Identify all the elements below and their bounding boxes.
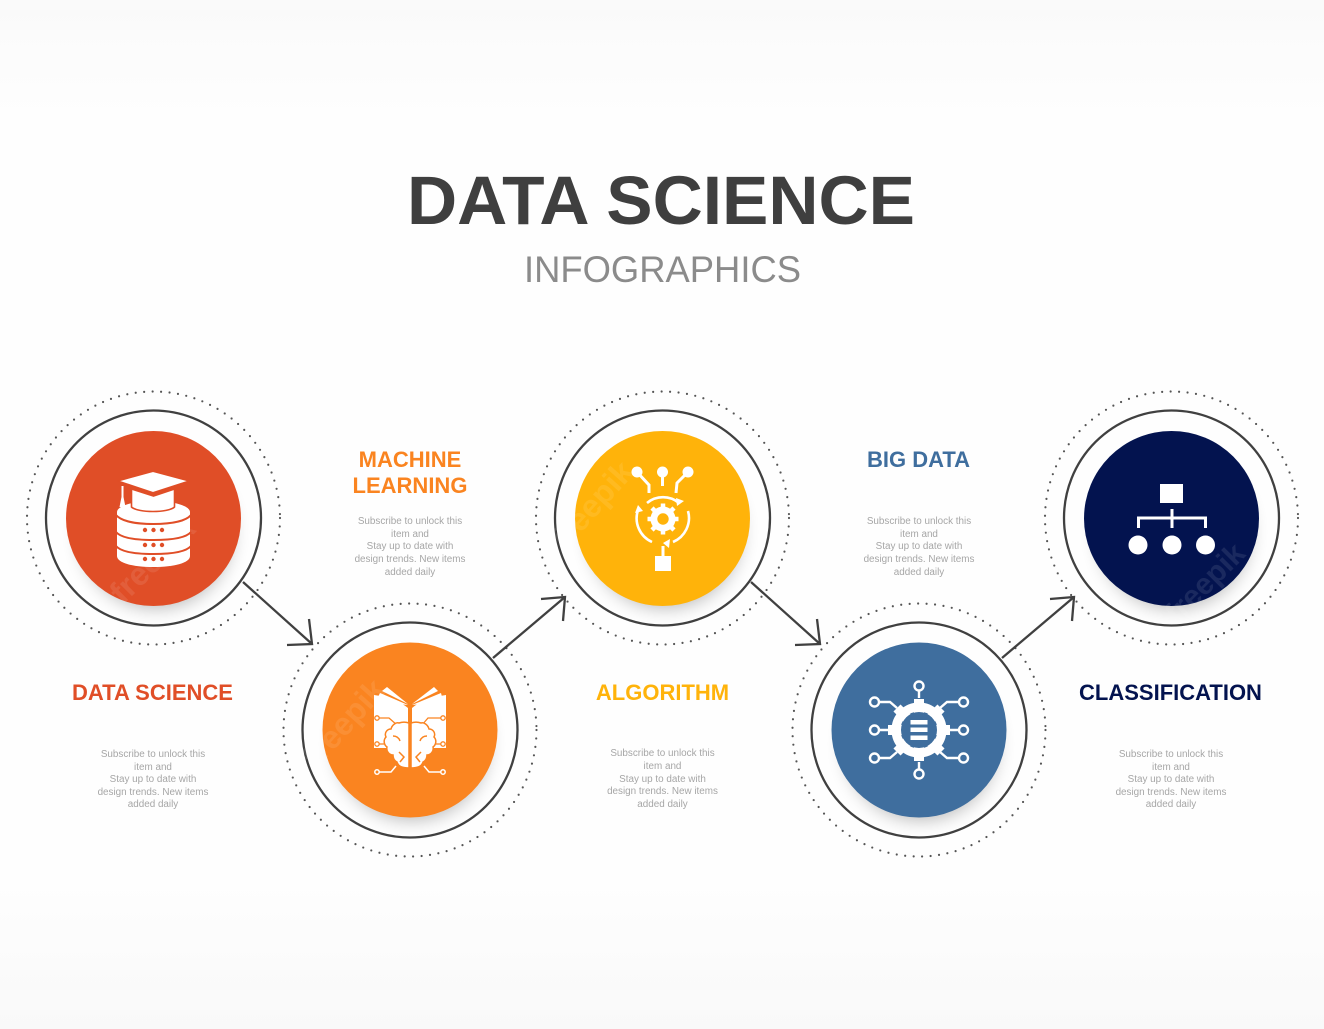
text block: classification	[1079, 680, 1262, 810]
text block: algorithm: added daily	[637, 799, 688, 810]
text block: data science: item and	[134, 762, 172, 773]
text block: big data: BIG DATA	[867, 447, 970, 472]
text block: big data	[864, 447, 974, 578]
text block: data science: Subscribe to unlock this	[101, 749, 205, 760]
text block: machine learning: Subscribe to unlock this	[358, 516, 462, 527]
text block: machine learning: item and	[391, 529, 429, 540]
text block: machine learning	[353, 447, 467, 578]
text block: machine learning: Stay up to date with	[367, 541, 453, 552]
icon: gear algorithm	[632, 466, 694, 571]
text block: machine learning: LEARNING	[353, 473, 467, 498]
step 2 circle: machine learning	[284, 604, 536, 856]
step 4 circle: big data	[792, 604, 1046, 856]
arrow: step 1 to 2	[243, 582, 312, 645]
text block: machine learning: MACHINE	[359, 447, 461, 472]
text block: algorithm: design trends. New items	[607, 786, 718, 797]
text block: data science: Stay up to date with	[110, 774, 196, 785]
step 5 circle: classification: freepik	[1159, 537, 1252, 630]
text block: classification: added daily	[1146, 799, 1196, 810]
text block: big data: added daily	[894, 567, 944, 578]
text block: classification: CLASSIFICATION	[1079, 680, 1262, 705]
text block: algorithm: ALGORITHM	[596, 680, 729, 705]
step 3 circle: algorithm: freepik	[543, 453, 640, 556]
text block: data science: added daily	[128, 799, 178, 810]
text block: machine learning: added daily	[385, 567, 435, 578]
text block: big data: Subscribe to unlock this	[867, 516, 971, 527]
arrow: step 2 to 3	[493, 597, 565, 658]
text block: data science: design trends. New items	[98, 787, 208, 798]
text block: data science	[72, 680, 233, 810]
text block: big data: Stay up to date with	[876, 541, 962, 552]
text block: algorithm	[596, 680, 729, 810]
icon: open book with brain	[374, 687, 446, 774]
text block: classification: Subscribe to unlock this	[1119, 749, 1223, 760]
step 1 circle: data science	[27, 392, 280, 644]
arrow: step 3 to 4	[751, 582, 820, 645]
text block: data science: DATA SCIENCE	[72, 680, 233, 705]
text block: classification: design trends. New items	[1116, 787, 1226, 798]
arrow: step 4 to 5	[1002, 597, 1074, 658]
step 5 circle: classification	[1045, 392, 1298, 644]
title: DATA SCIENCE	[407, 162, 915, 239]
text block: algorithm: Stay up to date with	[619, 774, 706, 785]
text block: algorithm: item and	[644, 761, 681, 772]
icon: hierarchy	[1128, 484, 1215, 554]
text block: classification: item and	[1152, 762, 1190, 773]
icon: gear with server and nodes	[870, 682, 968, 778]
step 3 circle: algorithm	[536, 392, 789, 644]
step 1 circle: data science: freepik	[102, 510, 202, 610]
icon: graduation cap on database	[116, 472, 191, 567]
subtitle: INFOGRAPHICS	[524, 249, 801, 290]
text block: algorithm: Subscribe to unlock this	[610, 748, 715, 759]
text block: big data: item and	[900, 529, 938, 540]
text block: classification: Stay up to date with	[1128, 774, 1214, 785]
text block: big data: design trends. New items	[864, 554, 974, 565]
step 2 circle: machine learning: freepik	[295, 671, 392, 774]
text block: machine learning: design trends. New items	[355, 554, 465, 565]
